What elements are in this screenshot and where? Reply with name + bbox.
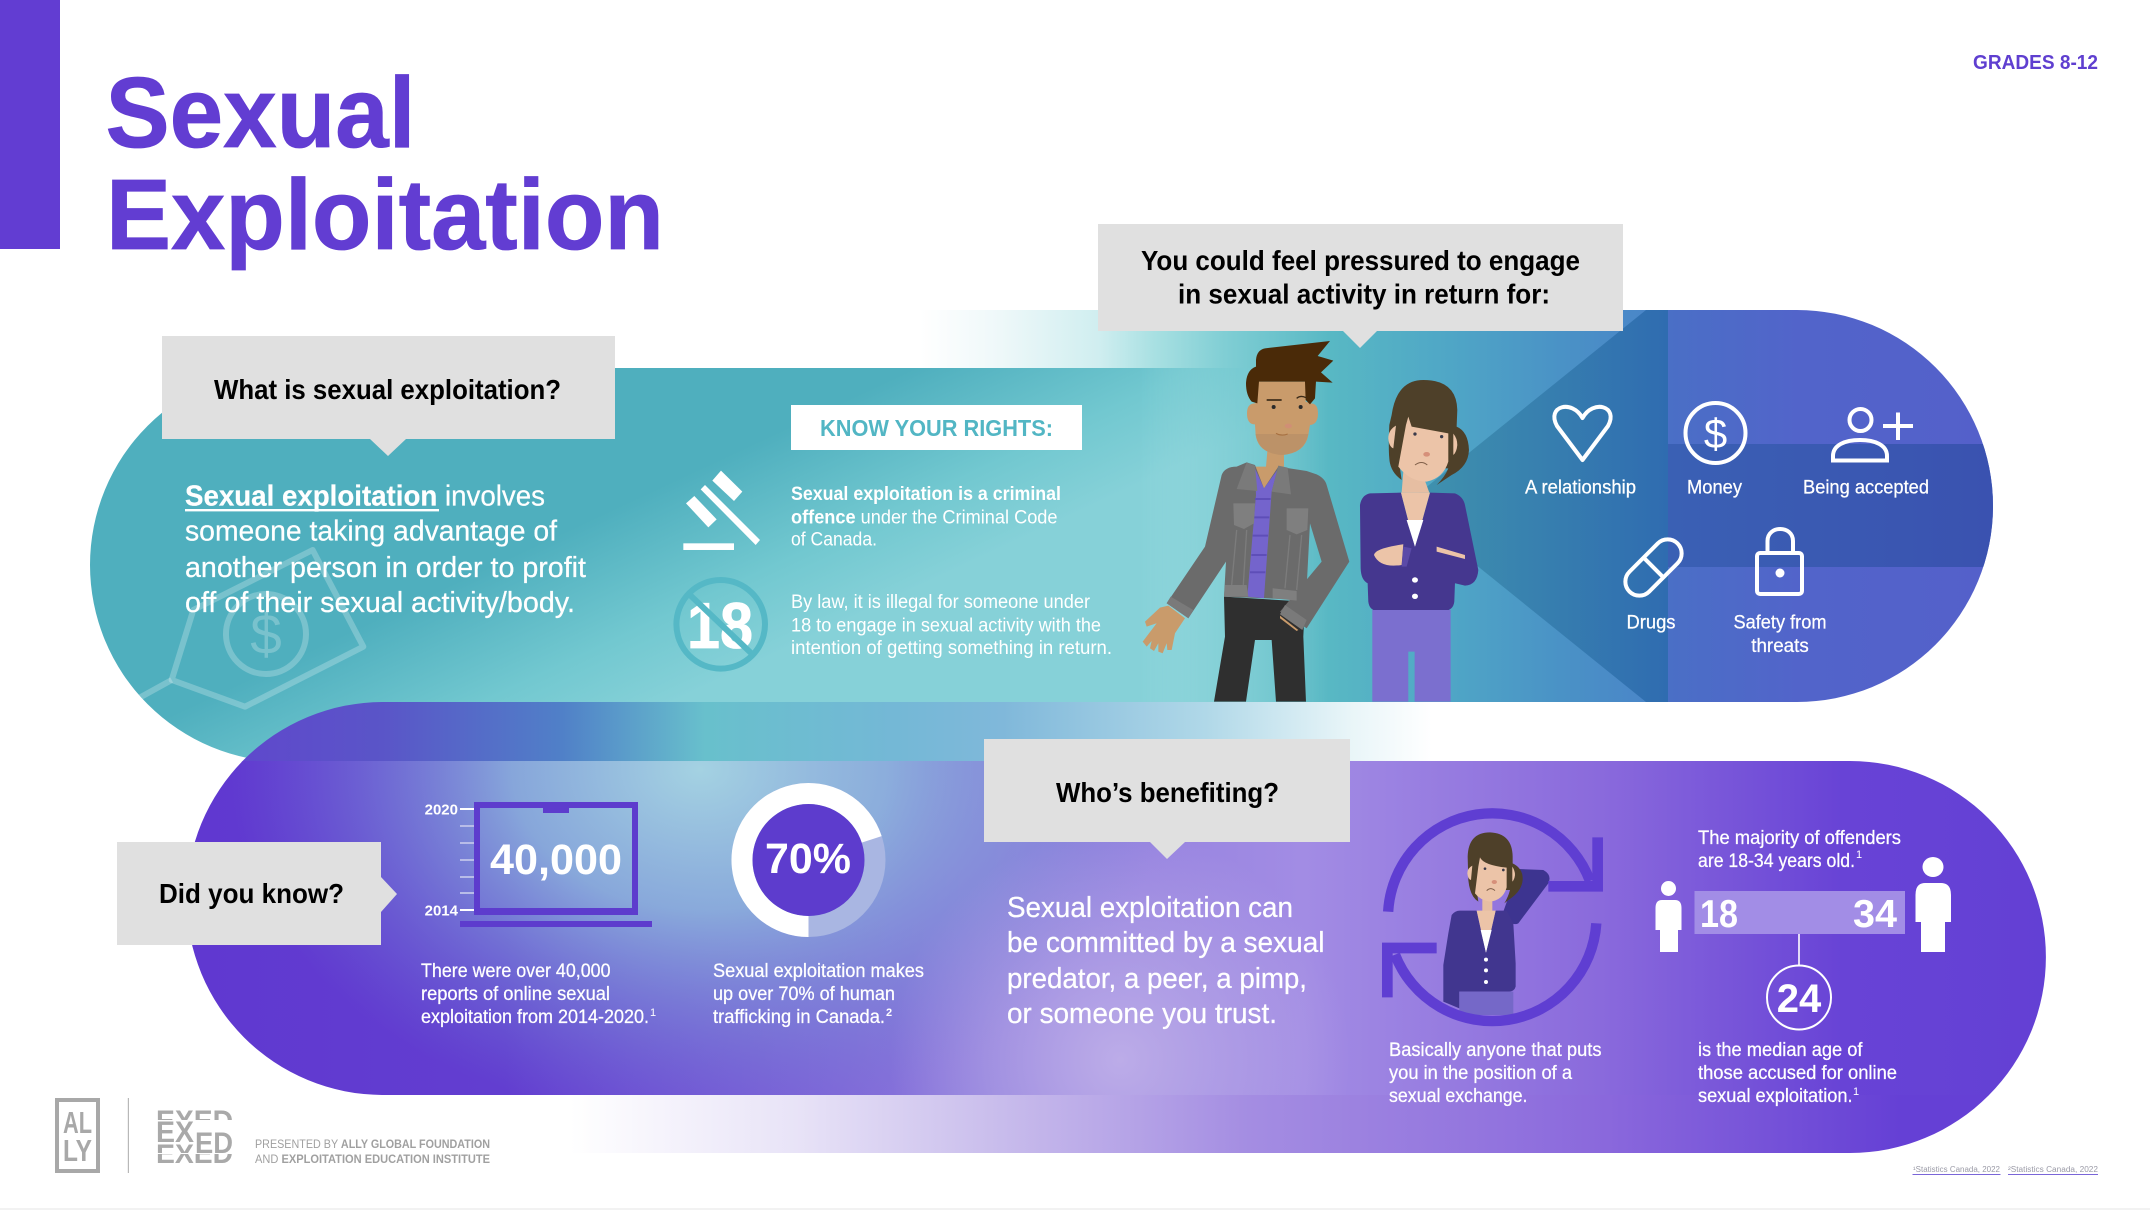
text block: median age: 1 xyxy=(1853,1086,1859,1098)
footer credit: AND EXPLOITATION EDUCATION INSTITUTE xyxy=(255,1154,490,1166)
callout: pressured to engage: You could feel pressured to engage xyxy=(1141,245,1580,276)
text block: majority of offenders xyxy=(1698,828,1901,872)
logo: ALLY: LY xyxy=(63,1133,92,1168)
text block: definition: another person in order to profit xyxy=(185,552,586,584)
item: being accepted: Being accepted xyxy=(1803,478,1929,498)
callout: what is sexual exploitation: What is sexual exploitation? xyxy=(214,374,561,405)
icon: large person xyxy=(1916,857,1951,952)
chart: laptop timeline 40,000: 2020 xyxy=(425,802,458,818)
logo: EXED: ED xyxy=(195,1127,233,1160)
text block: age law: 18 to engage in sexual activity with the xyxy=(791,616,1101,636)
illustration: woman xyxy=(1360,380,1478,702)
logo: ALLY: AL xyxy=(63,1105,92,1140)
chart: age range bar: 34 xyxy=(1853,893,1897,936)
logo: EXED: EX xyxy=(156,1116,194,1149)
text block: age law: intention of getting something in return. xyxy=(791,638,1112,659)
text block: median age: is the median age of xyxy=(1698,1040,1863,1061)
title: Exploitation xyxy=(106,159,664,271)
item: a relationship xyxy=(1525,407,1636,498)
text block: majority of offenders: 1 xyxy=(1856,849,1862,861)
icon: under 18 prohibited xyxy=(676,580,765,669)
text block: anyone exchange xyxy=(1389,1040,1602,1107)
text block: who commits: Sexual exploitation can xyxy=(1007,892,1293,924)
text block: 70% trafficking: up over 70% of human xyxy=(713,984,895,1005)
item: drugs: Drugs xyxy=(1626,612,1676,634)
icon: money tag watermark: $ xyxy=(250,604,282,667)
chart: 70% donut: 70% xyxy=(765,835,851,883)
item: money: $ xyxy=(1704,410,1727,457)
icon: under 18 prohibited: 18 xyxy=(687,589,753,662)
chart: median age 24 xyxy=(1767,934,1831,1030)
logo: EXED: EXED xyxy=(156,1105,233,1138)
heading: know your rights xyxy=(791,405,1082,450)
callout: did you know xyxy=(117,842,397,945)
text block: definition: someone taking advantage of xyxy=(185,516,558,548)
text block: median age: those accused for online xyxy=(1698,1063,1897,1084)
text block: 40,000 reports xyxy=(421,961,656,1028)
title xyxy=(106,57,664,271)
illustration: thinking woman xyxy=(1443,832,1550,1015)
text block: 70% trafficking xyxy=(713,961,924,1028)
text block: who commits: or someone you trust. xyxy=(1007,998,1277,1030)
chart: median age 24: 24 xyxy=(1777,977,1822,1021)
callout: pressured to engage: in sexual activity in return for: xyxy=(1178,278,1550,310)
text block: anyone exchange: Basically anyone that puts xyxy=(1389,1040,1602,1061)
item: money: Money xyxy=(1687,478,1742,498)
item: being accepted xyxy=(1803,409,1929,498)
chart: age range bar xyxy=(1694,891,1905,936)
text block: 40,000 reports: exploitation from 2014-2020. xyxy=(421,1007,649,1028)
chart: 70% donut xyxy=(742,794,875,926)
text block: 70% trafficking: 2 xyxy=(886,1007,892,1019)
footer credit xyxy=(255,1139,490,1166)
text block: majority of offenders: The majority of offenders xyxy=(1698,828,1901,849)
panel: top band background xyxy=(90,310,1998,762)
text block: 70% trafficking: Sexual exploitation makes xyxy=(713,961,924,982)
logo: EXED: EX xyxy=(156,1139,194,1172)
logo: ALLY xyxy=(57,1100,98,1171)
text block: 40,000 reports: reports of online sexual xyxy=(421,984,610,1005)
logo: EXED: EXED xyxy=(156,1137,233,1170)
footnotes: ¹Statistics Canada, 2022 xyxy=(1913,1165,2001,1174)
text block: 40,000 reports: 1 xyxy=(650,1007,656,1019)
text block: criminal offence: of Canada. xyxy=(791,530,877,550)
item: safety from threats xyxy=(1734,529,1826,657)
text block: definition: off of their sexual activity/body. xyxy=(185,587,575,619)
callout: what is sexual exploitation xyxy=(162,336,615,456)
text block: age law xyxy=(791,592,1112,659)
callout: pressured to engage xyxy=(1098,224,1623,348)
icon: exchange arrows xyxy=(1387,813,1598,1021)
text block: criminal offence xyxy=(791,484,1061,550)
panel: lower band background xyxy=(180,702,2060,1155)
item: safety from threats: Safety from xyxy=(1734,612,1826,634)
top-left accent bar xyxy=(0,0,60,249)
text block: anyone exchange: sexual exchange. xyxy=(1389,1086,1528,1107)
chart: laptop timeline 40,000: 2014 xyxy=(425,902,459,920)
logo: EXED xyxy=(158,1110,232,1163)
item: safety from threats: threats xyxy=(1751,636,1809,657)
text block: 40,000 reports: There were over 40,000 xyxy=(421,961,610,982)
heading: know your rights: KNOW YOUR RIGHTS: xyxy=(820,415,1053,441)
text block: anyone exchange: you in the position of a xyxy=(1389,1063,1572,1084)
footnotes xyxy=(1912,1165,2099,1175)
illustration: man xyxy=(1143,341,1349,702)
callout: did you know: Did you know? xyxy=(159,878,344,909)
text block: who commits: be committed by a sexual xyxy=(1007,927,1324,959)
item: drugs xyxy=(1620,534,1687,634)
item: money xyxy=(1686,403,1746,498)
divider xyxy=(128,1098,129,1173)
text block: median age: sexual exploitation. xyxy=(1698,1086,1852,1107)
text block: median age xyxy=(1698,1040,1897,1107)
text block: definition xyxy=(185,480,586,619)
text block: criminal offence: Sexual exploitation is a criminal xyxy=(791,484,1061,505)
footnotes: ²Statistics Canada, 2022 xyxy=(2008,1165,2099,1174)
chart: laptop timeline 40,000: 40,000 xyxy=(490,836,622,884)
title: Sexual xyxy=(106,57,416,169)
text block: criminal offence: offence under the Criminal Code xyxy=(791,508,1058,528)
text block: who commits: predator, a peer, a pimp, xyxy=(1007,963,1307,995)
item: a relationship: A relationship xyxy=(1525,478,1636,498)
footer credit: PRESENTED BY ALLY GLOBAL FOUNDATION xyxy=(255,1139,490,1151)
icon: small person xyxy=(1656,881,1682,952)
icon: gavel xyxy=(683,471,760,550)
text block: 70% trafficking: trafficking in Canada. xyxy=(713,1007,885,1028)
text block: definition: Sexual exploitation involves xyxy=(185,480,545,512)
icon: money tag watermark xyxy=(138,550,363,707)
chart: laptop timeline 40,000 xyxy=(425,802,652,927)
text block: age law: By law, it is illegal for someone under xyxy=(791,592,1091,613)
callout: who's benefiting: Who’s benefiting? xyxy=(1056,777,1279,808)
grade label: GRADES 8-12 xyxy=(1973,52,2098,74)
text block: who commits xyxy=(1007,892,1324,1030)
text block: majority of offenders: are 18-34 years old. xyxy=(1698,851,1855,872)
chart: age range bar: 18 xyxy=(1700,893,1738,936)
callout: who's benefiting xyxy=(984,739,1350,859)
